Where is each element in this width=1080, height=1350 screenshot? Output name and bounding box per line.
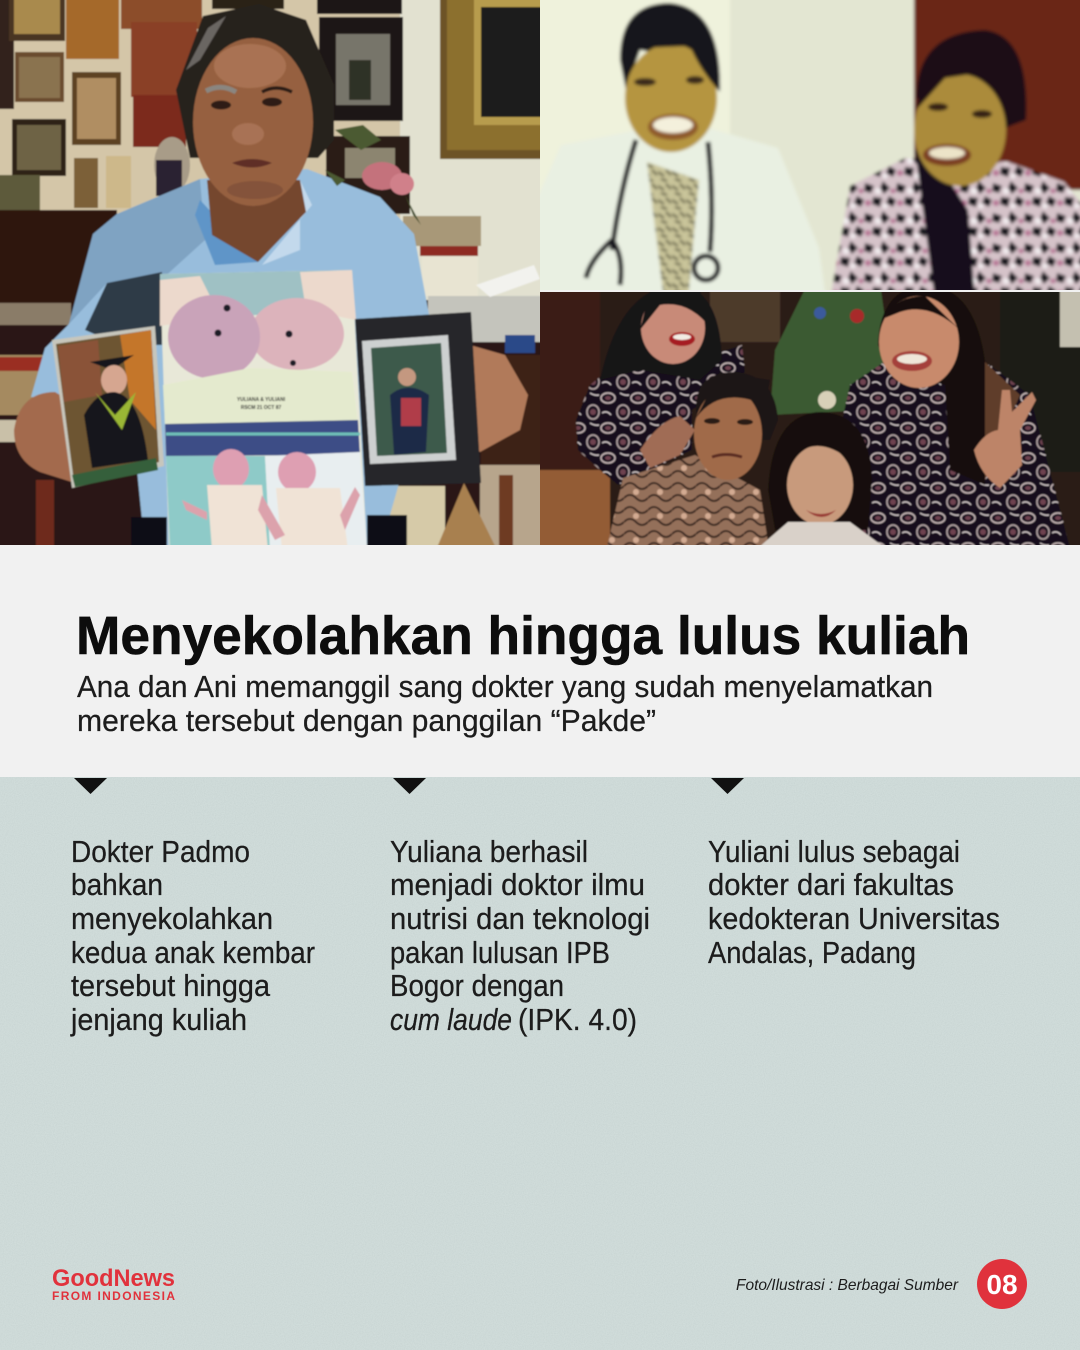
column 3: Yuliani: [708, 778, 1000, 970]
Dr Padmo seated: [605, 372, 778, 555]
woman in floral blouse: [830, 30, 1080, 300]
picture: conjoined twins album page: [160, 270, 367, 550]
peace sign hand: [974, 390, 1036, 488]
logo: GoodNews from Indonesia: FROM INDONESIA: [52, 1289, 175, 1303]
column text: menjadi doktor ilmu: [390, 867, 645, 902]
shirt: [31, 169, 440, 550]
desk and shelves: [0, 210, 117, 550]
photo: twins as doctors on a video call: [530, 0, 1080, 300]
column 2: Yuliana: [390, 778, 650, 1037]
title: Menyekolahkan hingga lulus kuliah: [76, 606, 970, 666]
column text: tersebut hingga: [71, 968, 271, 1003]
photo: doctor holding pictures of the twins: [0, 0, 550, 555]
marker triangle: [74, 778, 107, 794]
column text: bahkan: [71, 867, 163, 902]
caption printed on the twins photo: YULIANA & YULIANI: [237, 397, 286, 403]
left hand: [13, 391, 72, 482]
column text: pakan lulusan IPB: [390, 935, 610, 970]
column text: Yuliana berhasil: [390, 834, 588, 869]
daughter on right: [840, 285, 1072, 555]
column text: jenjang kuliah: [70, 1002, 247, 1037]
page number badge: 08: [986, 1269, 1018, 1300]
column 1: Dokter Padmo: [70, 778, 315, 1037]
subtitle: mereka tersebut dengan panggilan “Pakde”: [77, 703, 656, 738]
subtitle: [77, 669, 933, 738]
column text: [708, 834, 1000, 970]
column text: dokter dari fakultas: [708, 867, 954, 902]
panel: lower textured background: [0, 777, 1080, 1350]
marker triangle: [711, 778, 744, 794]
older woman: [760, 412, 883, 545]
logo: GoodNews from Indonesia: GoodNews: [52, 1265, 175, 1292]
photo credit: Foto/Ilustrasi : Berbagai Sumber: [736, 1277, 959, 1294]
column text: kedokteran Universitas: [708, 901, 1000, 936]
caption printed on the twins photo: [237, 397, 286, 411]
column text: Bogor dengan: [390, 968, 564, 1003]
column text: menyekolahkan: [71, 901, 273, 936]
column text: nutrisi dan teknologi: [390, 901, 650, 936]
column text: [70, 834, 315, 1037]
christmas tree: [770, 292, 886, 416]
column text: Dokter Padmo: [71, 834, 250, 869]
column text: (IPK. 4.0): [518, 1002, 637, 1037]
right hand: [472, 345, 529, 453]
wall frames: [0, 0, 550, 214]
picture: graduation portrait: [52, 326, 164, 488]
photo: family gathered by the Christmas tree: [530, 282, 1080, 555]
daughter on left: [576, 285, 745, 485]
stethoscope: [586, 140, 718, 285]
marker triangle: [393, 778, 426, 794]
neck and face: [176, 4, 334, 262]
column text: [390, 834, 650, 1037]
books and papers: [389, 215, 540, 545]
woman in white coat: [581, 1, 824, 290]
panel: heading band: [0, 545, 1080, 777]
column text: Yuliani lulus sebagai: [708, 834, 960, 869]
column text: kedua anak kembar: [71, 935, 315, 970]
picture: black graduation frame: [355, 312, 481, 486]
caption printed on the twins photo: RSCM 21 OCT 87: [241, 405, 281, 411]
column text: Andalas, Padang: [708, 935, 916, 970]
column text: cum laude: [390, 1002, 512, 1037]
subtitle: Ana dan Ani memanggil sang dokter yang sudah menyelamatkan: [77, 669, 933, 704]
page number badge: [977, 1259, 1027, 1309]
plant with flowers: [325, 125, 421, 225]
